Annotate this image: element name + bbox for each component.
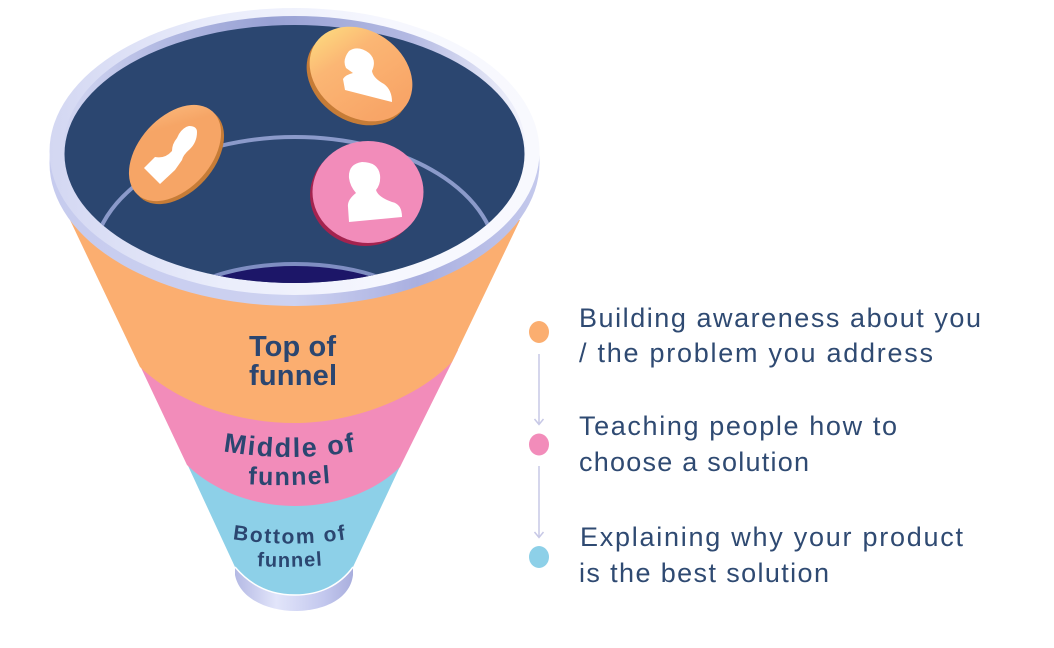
text: step 3: Explaining why your product [580,522,963,552]
label: bottom of funnel [234,524,344,567]
funnel base [235,565,353,611]
top of funnel band [70,220,520,423]
coin: top right [288,7,431,145]
funnel interior [64,25,524,283]
label: middle of funnel [224,432,354,486]
text: step 1 [579,303,981,368]
label: top of funnel: funnel [249,360,337,392]
text: step 3 [579,522,963,588]
text: step 1: Building awareness about you [579,303,981,333]
bottom of funnel band [183,455,404,595]
text: step 2: Teaching people how to [579,411,897,441]
funnel [70,220,520,611]
text: step 3: is the best solution [579,558,829,588]
step 3 marker [529,546,549,568]
label: bottom of funnel: Bottom of [234,524,344,544]
arrow 2 to 3 [534,466,544,538]
label: bottom of funnel: funnel [258,551,321,567]
coin: pink [310,141,424,246]
label: top of funnel: Top of [249,331,336,363]
step 1 marker [529,321,549,343]
label: middle of funnel: funnel [248,465,329,486]
text: step 2: choose a solution [579,447,809,477]
arrow 1 to 2 [534,354,544,424]
inner ring: bottom [213,262,376,283]
funnel rim [50,8,540,306]
inner ring: middle [100,135,489,226]
label: middle of funnel: Middle of [224,432,354,458]
middle of funnel band [135,350,458,506]
text: step 1: / the problem you address [579,338,933,368]
text: step 2 [579,411,897,477]
label: top of funnel [249,331,337,392]
step 2 marker [529,434,549,456]
coin: left [111,87,242,222]
